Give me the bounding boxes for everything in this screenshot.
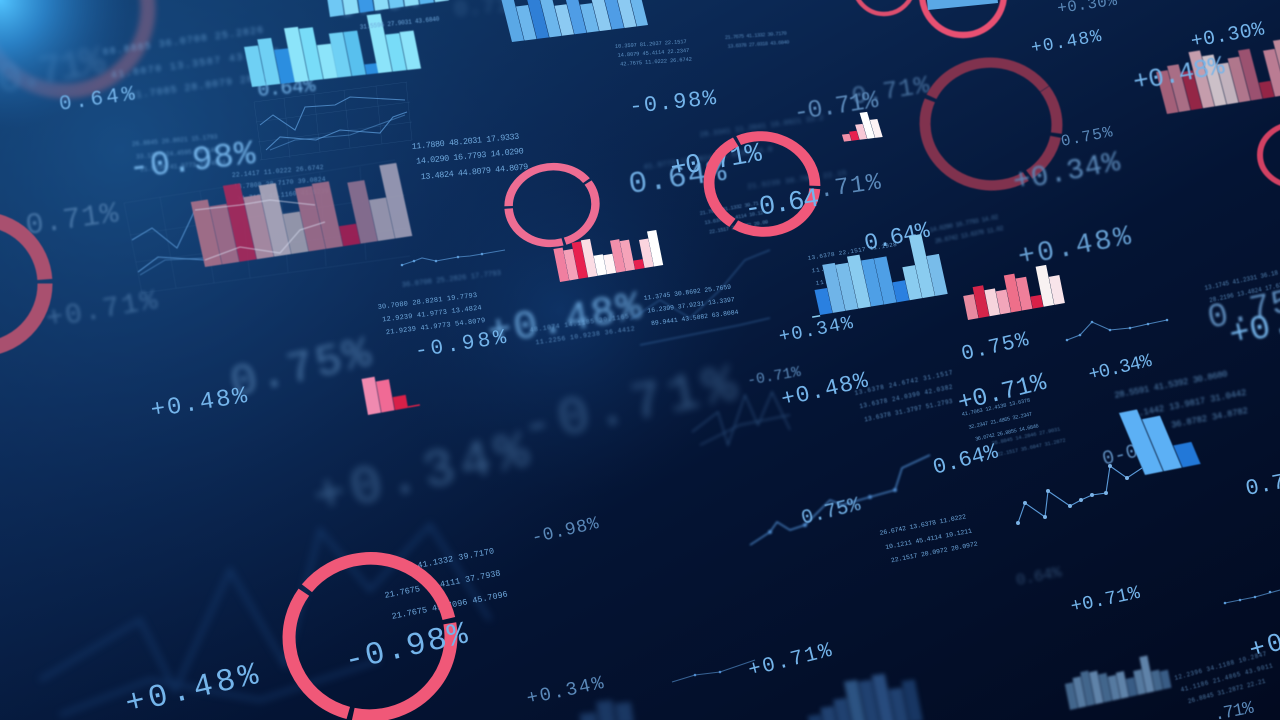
line chart: right dotted small [1066, 319, 1168, 341]
data table: small inside large ring [699, 199, 769, 237]
bar chart: pink and white centre [553, 228, 663, 282]
ring: bottom red [241, 511, 499, 720]
bar chart: blue centre-right [798, 232, 948, 318]
data table: dim lower right: 22.1517 35.6847 31.2872 [996, 437, 1066, 458]
chart: blurred bottom-left line chart [40, 525, 490, 715]
data table: beneath +0.71: 32.2347 21.4865 32.2347 [968, 410, 1033, 431]
text: +0.48 lower: +0.48% [779, 368, 871, 413]
data table: under top centre chart: 10.3597 81.2037 22.1517 [615, 38, 687, 50]
data table: dim lower right [991, 425, 1066, 459]
text: 0.64 dim lower: 0.64% [1015, 563, 1063, 590]
line chart: dotted bottom right [1224, 590, 1280, 604]
data table: above grey chart: 22.1417 11.0222 26.6742 [232, 164, 324, 179]
data table: bottom right: 41.1186 21.4865 43.9011 [1180, 662, 1274, 694]
data table: centre-left: 21.9239 41.9773 54.8079 [386, 317, 486, 337]
data table: blurred top-left: 21.7085 28.8079 28.4824 [128, 70, 288, 103]
ring: left pink [0, 219, 45, 349]
text: 0.71 upper right dim: 0.71% [850, 71, 932, 112]
text: 0.64 lower right: 0.64% [930, 439, 1001, 481]
data table: behind blue chart: 13.6378 22.1517 11.1928 [807, 241, 898, 262]
text: +0.48 over chart: +0.48% [1131, 51, 1227, 98]
data table: blurred top-left: 88.8885 36.0708 25.2826 [102, 26, 264, 59]
bar chart: red and white right of blue [960, 263, 1065, 320]
data table: top small: 31.5596 27.9031 43.6840 [359, 16, 440, 31]
data table: bottom right [1174, 650, 1277, 707]
data table: blurred above blue small chart [1114, 366, 1251, 440]
text: 0.75 lower right: 0.75% [959, 329, 1031, 367]
bar chart: muted blue bottom right [1063, 652, 1172, 710]
data table: behind blue chart: 11.3745 [811, 263, 842, 275]
text: -0.98 percent blurred left: -0.98% [127, 136, 258, 189]
text: 0.75 lower centre: 0.75% [799, 494, 864, 531]
data table: above grey chart [232, 164, 329, 203]
data table: lower centre right small: 22.1517 20.0972 20.0972 [890, 541, 978, 564]
text: 0.64 centre: 0.64% [627, 155, 729, 203]
data table: centre lower blurred [529, 313, 635, 347]
line overlay on grey chart [195, 200, 325, 260]
data table: blurred above blue small chart: 28.5591 41.5392 30.8680 [1114, 369, 1228, 401]
data table: behind bottom ring [379, 545, 509, 622]
data table: bottom right: 12.2396 34.1188 10.2847 [1174, 650, 1268, 682]
text: +0.34 right of ring: +0.34% [1010, 146, 1123, 199]
text: +0.71 bottom centre: +0.71% [746, 640, 835, 683]
text: 0-0 beside blue chart: 0-0 [1100, 441, 1141, 472]
data table: lower centre right small [879, 512, 978, 565]
line chart: blurred centre lines [630, 250, 770, 345]
data table: under top centre chart: 42.7675 11.0222 26.6742 [620, 56, 692, 68]
text: +0.34 lower centre: +0.34% [777, 312, 855, 348]
text: 0.71 right of ring: .71% [817, 169, 883, 205]
text: +0.48 blurred centre: +0.48% [484, 285, 646, 357]
text: +0.48 top right: +0.48% [1030, 27, 1103, 59]
data table: behind bottom ring: 21.7675 45.7096 45.7096 [391, 589, 509, 622]
data table: above grey chart: 13.7808 28.7170 39.0824 [234, 176, 326, 191]
data table: blurred top-left [102, 23, 288, 106]
data table: above grey chart: 34.7193 42.1160 41.9239 [237, 188, 329, 203]
data table: beneath +0.71: 36.0742 26.8855 14.6846 [974, 422, 1039, 443]
ring: right edge red [1260, 124, 1280, 186]
data table: blurred behind large ring: 21.9239 30.7080 22.15 [747, 170, 848, 192]
data table: centre lower blurred: 48.1074 14.1185 30.1165 [529, 313, 629, 334]
data table: right of line chart: 13.4824 44.8079 44.8079 [420, 162, 529, 182]
data table: centre-left [377, 291, 486, 338]
bar chart: blurred bottom edge [578, 698, 634, 720]
data table: beneath +0.71 [961, 396, 1039, 444]
data table: top small right: 13.6378 27.0318 43.6840 [727, 39, 790, 50]
data table: blurred above blue small chart: .1442 13.9817 31.0442 [1137, 388, 1247, 419]
data table: blurred above blue chart: 26.6742 13.6378 11.02 [934, 225, 1004, 245]
data table: right of line chart: 11.7880 48.2031 17.9333 [411, 132, 520, 152]
text: +0.71 lower right: +0.71% [1069, 582, 1142, 618]
ring: upper right dim [891, 30, 1091, 218]
data table: blurred left of -0.98: 26.8845 20.8021 15.1793 [132, 134, 218, 148]
line chart: grid with three series top-left [254, 82, 412, 160]
data table: centre lower right: 16.2399 37.9231 13.3397 [647, 296, 735, 315]
data table: right of line chart [411, 131, 529, 183]
data table: centre-left blurred header: 36.0708 25.2826 17.7793 [401, 270, 502, 290]
data table: blurred behind large ring: 41.9773 13.4824 12.9239 14.0 [643, 146, 774, 172]
data table: right of line chart: 14.0290 16.7793 14.0290 [416, 146, 524, 167]
data table: behind bottom ring: 21.7675 41.4111 37.7938 [384, 568, 501, 601]
text: +0.34 bottom: +0.34% [525, 672, 606, 710]
data table: under top centre chart [615, 38, 692, 68]
text: -0.98 lower: -0.98% [530, 514, 601, 549]
text: -0.98 centre top: -0.98% [628, 86, 718, 120]
data table: blurred behind large ring: 28.3341 11.2041 16.0921 33.2 [699, 115, 824, 140]
data table: centre-left: 30.7080 28.8281 19.7793 [377, 292, 478, 312]
data table: lower centre right small: 10.1211 45.4114 10.1211 [885, 527, 973, 551]
text: +0.34 large blurred: +0.34% [308, 422, 535, 529]
data table: right edge top [1204, 269, 1280, 305]
data table: behind bottom ring: 41.1332 39.7170 [417, 546, 495, 571]
bar chart: blurred bottom centre [802, 669, 923, 720]
text: +0.30 right over chart: +0.30% [1189, 18, 1267, 54]
line chart: grid behind grey bars [124, 160, 410, 293]
data table: centre lower right [643, 283, 739, 328]
ring: blurred top-left [0, 0, 148, 91]
data table: blurred left of -0.98: 33.1287 24.4595 30.1487 [136, 146, 222, 161]
bar chart: top centre-left light blue [326, 0, 449, 17]
data table: under top centre chart: 14.8079 45.4114 22.2347 [617, 47, 690, 59]
data table: blurred behind large ring [640, 112, 848, 206]
text: +0.48 lower left: +0.48% [149, 383, 250, 425]
text: 0.75 large blurred left: 0.75% [226, 329, 376, 410]
data table: top small right: 21.7675 41.1332 39.7170 [725, 30, 787, 41]
data table: lower centre right small: 26.6742 13.6378 11.0222 [879, 513, 967, 537]
data table: dim lower right: 26.8845 14.2846 27.9031 [991, 425, 1062, 447]
text: -0.71 large blurred: -0.71% [516, 355, 742, 459]
bar chart: top behind ring [927, 0, 998, 10]
text: -0.98 centre: -0.98% [413, 327, 508, 364]
data table: blurred left of -0.98 [132, 133, 226, 174]
data table: small inside large ring: 22.1517 20.0972 20.09 [709, 218, 769, 236]
bar chart: muted grey and pink [188, 160, 412, 267]
ring: centre pink small [498, 156, 606, 254]
bar chart: small pink and white [836, 111, 883, 142]
top-left lens glow [0, 0, 240, 200]
text: 0.64 above blue chart: 0.64% [862, 218, 932, 257]
data table: lower centre right: 13.6378 24.0390 42.0382 [859, 384, 954, 410]
bar chart: small pink lower left [362, 370, 420, 415]
text: -0.98 in bottom ring: -0.98% [341, 615, 472, 680]
data table: beneath +0.71: 41.7063 12.4138 13.6378 [961, 397, 1031, 418]
data table: blurred above blue small chart: 36.8782 34.8782 [1170, 406, 1249, 431]
ring: top small red [854, 0, 914, 14]
text: -0.71 small: -0.71% [746, 364, 803, 390]
bar chart: light blue top-left [240, 11, 421, 87]
data table: lower centre right: 13.6378 31.3797 51.2793 [864, 398, 954, 424]
line chart: blurred dotted series lower centre [750, 455, 930, 545]
text: +0.48 right: +0.48% [1016, 222, 1134, 274]
data table: small inside large ring: 13.6378 45.4114 10.12 [704, 209, 764, 226]
data table: centre lower right: 89.9441 43.5082 63.8084 [651, 309, 739, 327]
ring: centre large red [680, 108, 844, 260]
bar chart: top centre blue [498, 0, 648, 42]
text: 0.71 left dim: 0.71% [24, 197, 121, 244]
data table: behind blue chart: 11.0222 [815, 275, 846, 287]
data table: bottom right: 26.8845 31.2872 22.21 [1187, 678, 1267, 705]
data table: top small right [725, 30, 790, 50]
bar chart: blue small right [1119, 402, 1201, 475]
data table: behind blue chart [807, 241, 902, 288]
ring: top red [922, 0, 1004, 35]
data table: lower centre right: 13.6378 24.6742 31.1517 [854, 369, 954, 397]
text: -0.71 upper centre: -0.71% [792, 86, 881, 128]
line chart: dotted series centre-left [401, 250, 505, 266]
line chart: blurred star lines centre [692, 392, 790, 445]
bar chart: red and white top-right [1152, 37, 1280, 114]
text: -0.64 on ring: -0.64 [743, 185, 821, 226]
text: 0.64 percent top-left: 0.64% [58, 84, 137, 117]
data table: small inside large ring: 21.7675 41.1332 39.71 [699, 200, 760, 217]
data table: right edge top: 13.1745 41.2331 36.18 [1204, 269, 1279, 292]
data table: blurred above blue chart [929, 213, 1004, 246]
text: +0.34 right: +0.34% [1086, 350, 1154, 386]
data table: blurred above blue chart: 14.0290 16.7793 14.02 [929, 214, 999, 234]
line chart: dotted bottom centre [672, 660, 755, 682]
text: +0.71 left dim: +0.71% [44, 286, 160, 336]
text: +0.71 centre: +0.71% [668, 139, 765, 185]
data table: blurred top-left: 41.8070 13.3587 43.7793 [110, 47, 280, 82]
text: +0.71 lower right: +0.71% [955, 368, 1050, 418]
data table: blurred left of -0.98: 21.9239 41.9773 13.4824 [140, 159, 226, 173]
line chart: dotted series lower right [1016, 464, 1142, 525]
data table: centre-left: 12.9239 41.9773 13.4824 [382, 304, 482, 325]
data table: lower centre right [854, 369, 959, 424]
data table: centre lower blurred: 11.2256 10.9238 36.4412 [535, 325, 635, 346]
data table: centre lower right: 11.3745 30.8692 25.7659 [643, 284, 732, 302]
text: 0.75 right: 0.75% [1060, 123, 1114, 151]
text: 0.64 behind blue chart: 0.64% [257, 75, 317, 103]
